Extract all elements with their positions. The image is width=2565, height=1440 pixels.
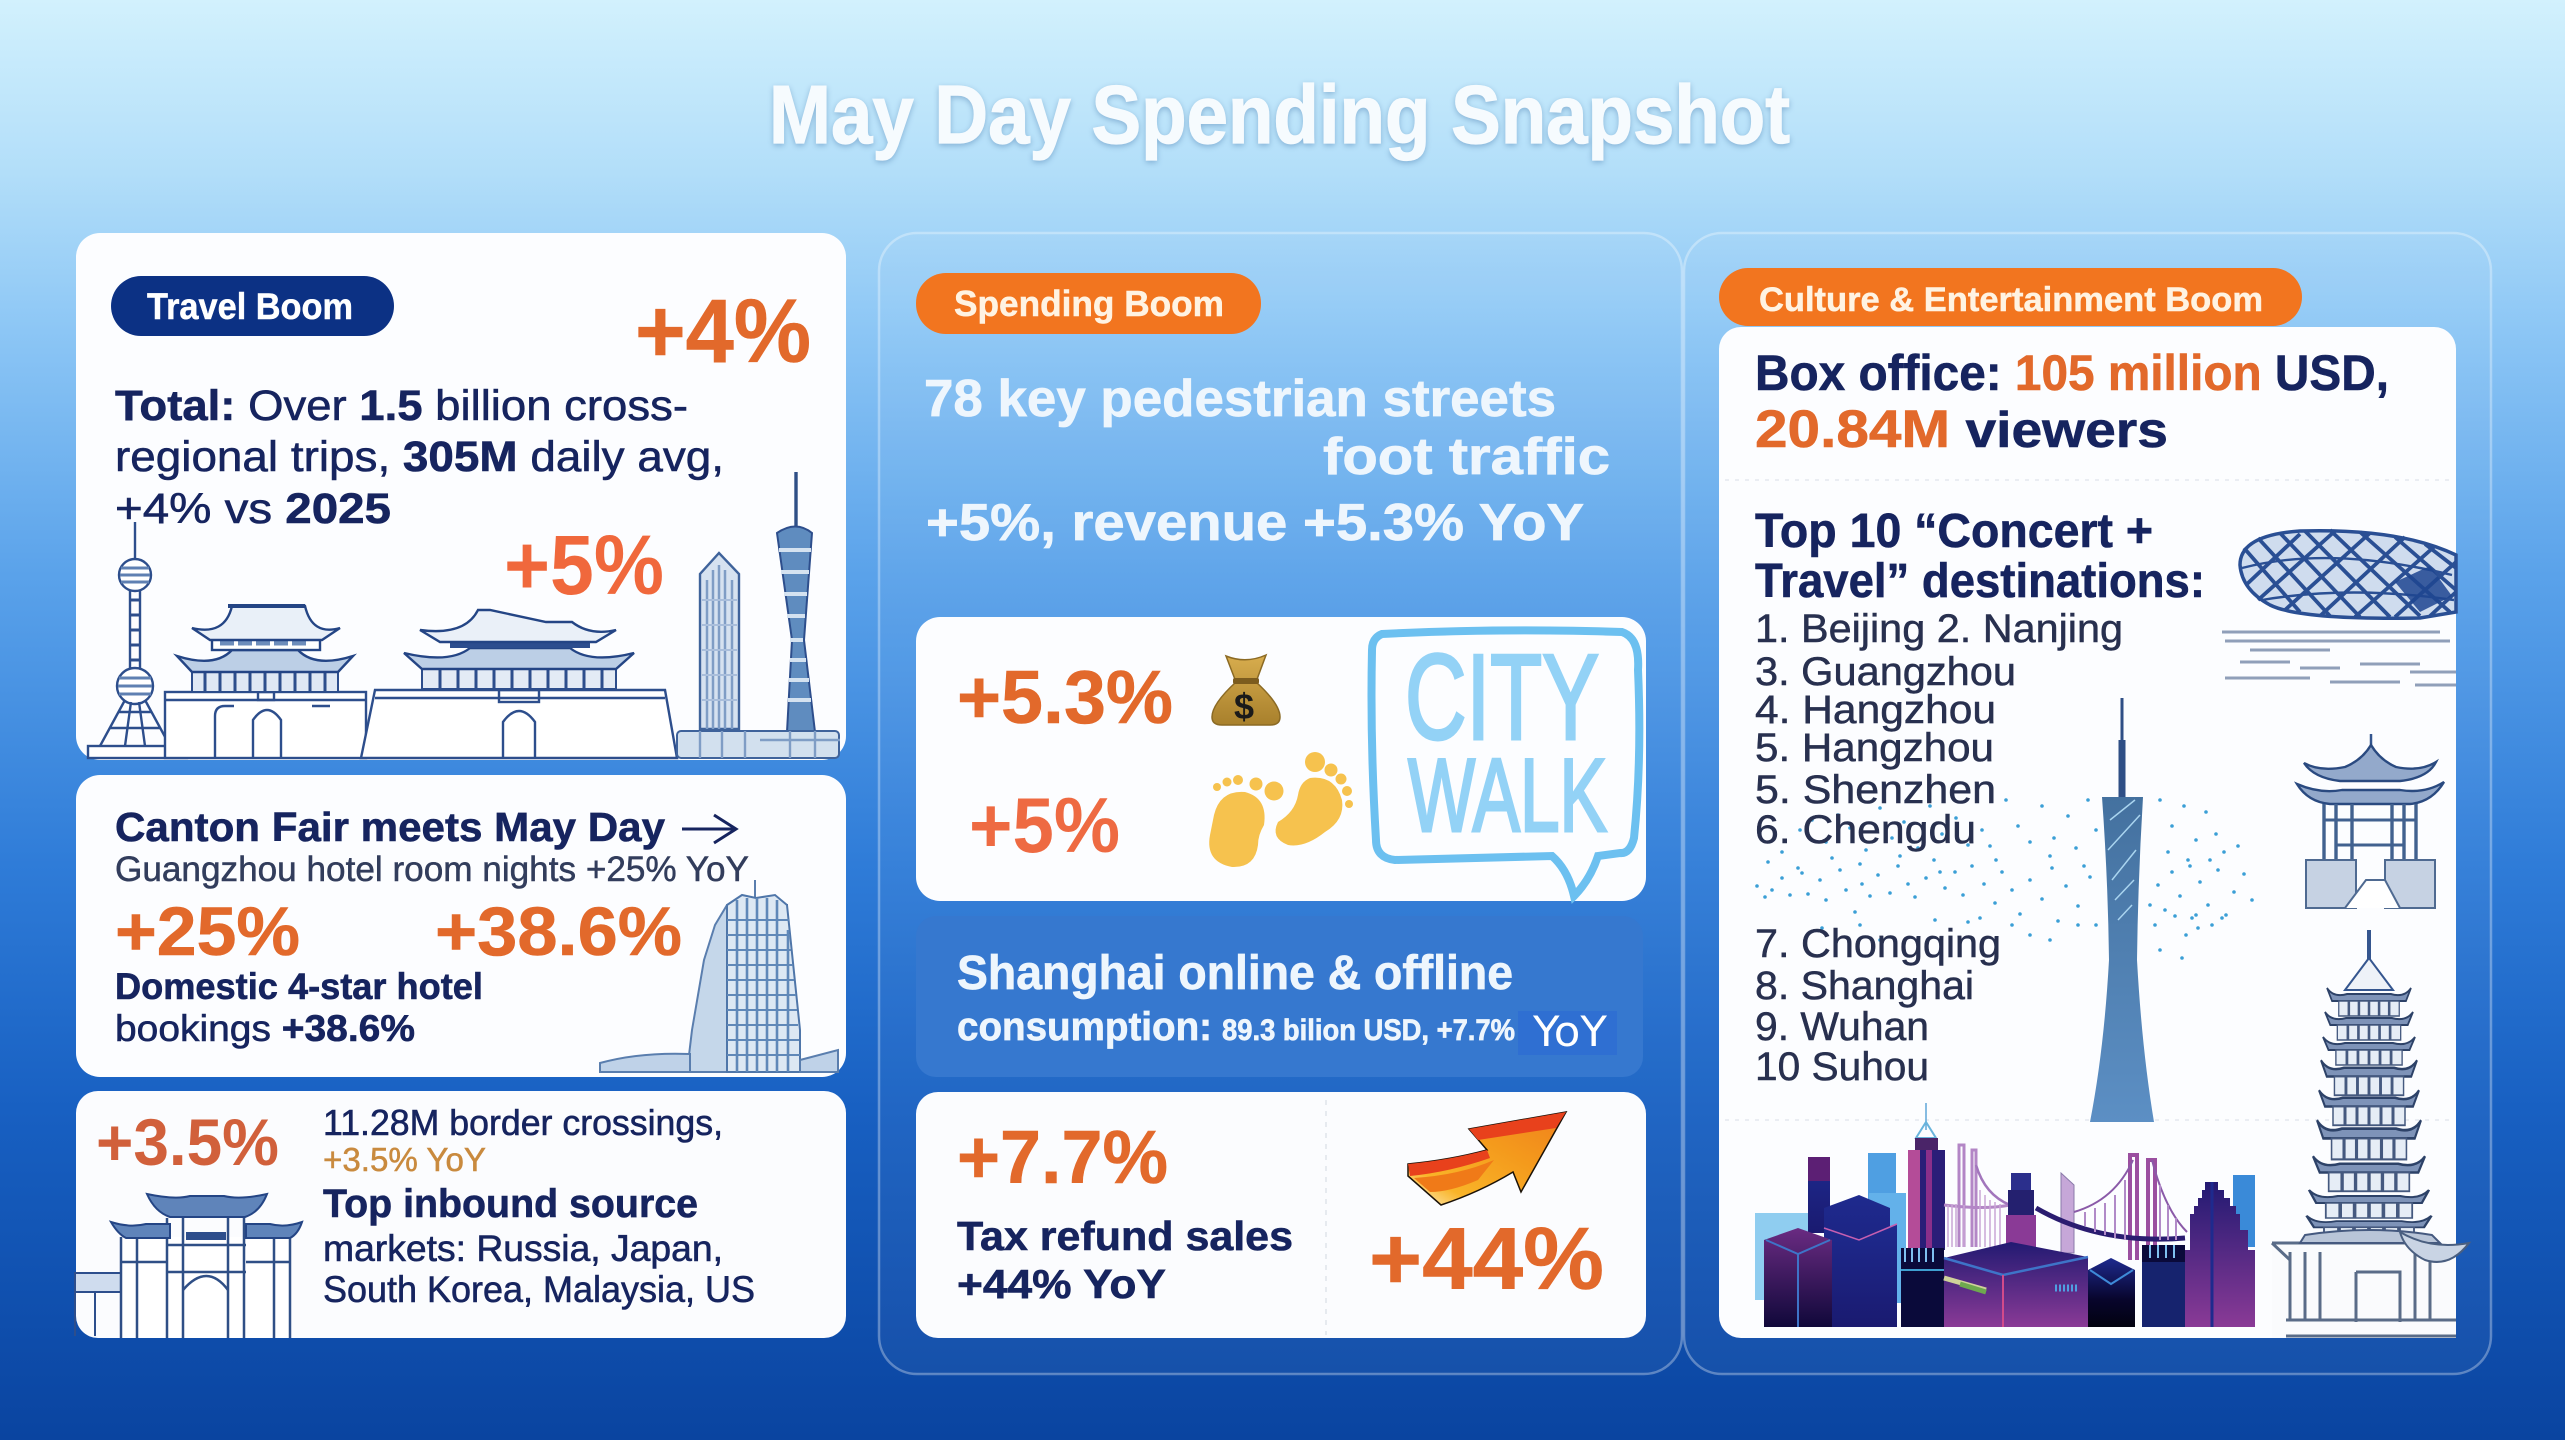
text: total trips [115,382,724,533]
icon: money bag: $ [1234,686,1254,727]
text: border crossings [323,1102,723,1178]
icon: pagoda [2272,930,2469,1338]
panel: culture and entertainment [1719,327,2469,1338]
title: May Day Spending Snapshot [769,68,1790,161]
icon: rising arrow [1408,1112,1566,1205]
icon: canton tower [2090,698,2154,1122]
badge: spending boom: Spending Boom [954,283,1224,324]
text: tax refund: Tax refund sales [957,1213,1293,1259]
text: four-star bookings: Domestic 4-star hotel [115,966,483,1007]
panel: shanghai consumption [916,916,1643,1077]
icon: city walk speech bubble: WALK [1408,738,1607,854]
icon: bird's nest stadium [2240,530,2456,618]
text: tax refund [957,1213,1293,1307]
badge: culture and entertainment boom [1719,268,2302,326]
heading: top ten destinations [1755,505,2205,608]
panel: city walk stats [916,617,1646,901]
text: four-star bookings [115,966,483,1049]
panel: travel boom [76,233,846,760]
text: border crossings: 11.28M border crossings, [323,1102,723,1143]
text: inbound markets: Top inbound source [323,1182,698,1226]
icon: gate two [361,610,677,758]
text: pedestrian streets: foot traffic [1323,428,1610,486]
list: destinations: 7. Chongqing [1755,922,2001,966]
icon: footprints [1209,752,1353,867]
text: pedestrian streets: 78 key pedestrian streets [924,370,1556,428]
text: consumption value: consumption: [957,1005,1212,1049]
icon: oriental pearl tower [88,522,187,758]
icon: paifang gate [75,1194,302,1338]
text: shanghai heading: Shanghai online & offline [957,947,1513,1000]
list: destinations: 5. Hangzhou [1755,726,1994,770]
text: box office [1755,345,2389,459]
list: destinations [1755,607,2123,1089]
icon: money bag [1212,655,1280,727]
panel: canton fair [76,775,846,1077]
text: inbound markets [323,1182,755,1310]
stat: +7.7%: +7.7% [957,1115,1168,1199]
heading: top ten destinations: Top 10 “Concert + [1755,505,2153,558]
text: yoy patch: YoY [1532,1007,1607,1056]
icon: skyscraper [700,553,739,729]
badge: travel boom [111,276,394,336]
badge: culture and entertainment boom: Culture & Entertainment Boom [1759,281,2263,319]
panel: tax refund [916,1092,1646,1338]
text: border crossings: +3.5% YoY [323,1141,486,1178]
text: pedestrian streets [924,370,1610,552]
icon: pavilion [2297,734,2444,908]
text: consumption value [957,1005,1515,1049]
stat: +3.5%: +3.5% [96,1105,279,1179]
list: destinations: 5. Shenzhen [1755,768,1996,812]
dots: fireworks [1757,800,2252,958]
illustration: neon city skyline [1755,1103,2255,1327]
decoration: water lines [2222,632,2456,685]
heading: canton fair: Canton Fair meets May Day [115,804,665,850]
badge: spending boom [916,273,1261,334]
text: consumption value: 89.3 bilion USD, +7.7% [1222,1014,1515,1047]
list: destinations: 1. Beijing 2. Nanjing [1755,607,2123,651]
text: inbound markets: markets: Russia, Japan, [323,1228,723,1269]
text: tax refund: +44% YoY [957,1261,1166,1307]
panel: culture boom outline [1684,233,2491,1374]
icon: canton tower [777,472,815,732]
stat: +5.3%: +5.3% [957,655,1173,739]
text: total trips: regional trips, 305M daily avg, [115,433,724,481]
icon: gate one [165,606,366,758]
text: four-star bookings: bookings +38.6% [115,1008,415,1049]
stat: +5%: +5% [504,518,664,612]
text: box office: 20.84M viewers [1755,400,2168,459]
heading: top ten destinations: Travel” destinations: [1755,555,2205,608]
illustration: skyline [88,472,840,758]
list: destinations: 9. Wuhan [1755,1005,1929,1049]
text: pedestrian streets: +5%, revenue +5.3% YoY [926,494,1584,552]
list: destinations: 3. Guangzhou [1755,650,2016,694]
list: destinations: 8. Shanghai [1755,964,1974,1008]
stat: +25%: +25% [115,893,300,970]
list: destinations: 6. Chengdu [1755,808,1976,852]
badge: travel boom: Travel Boom [147,286,353,327]
stat: +44%: +44% [1369,1209,1604,1308]
icon: city walk speech bubble [1372,629,1639,896]
text: inbound markets: South Korea, Malaysia, US [323,1269,755,1310]
stat: +5%: +5% [969,781,1120,869]
panel: spending boom outline [879,233,1682,1374]
icon: hotel tower [600,880,838,1072]
list: destinations: 10 Suhou [1755,1045,1929,1089]
text: box office: Box office: 105 million USD, [1755,345,2389,401]
stat: +4%: +4% [635,282,811,382]
text: total trips: Total: Over 1.5 billion cross- [115,382,688,430]
list: destinations: 4. Hangzhou [1755,688,1996,732]
stat: +38.6%: +38.6% [435,893,682,970]
text: total trips: +4% vs 2025 [115,485,391,533]
icon: city walk speech bubble: CITY [1405,629,1599,765]
arrow [682,815,736,843]
text: room nights: Guangzhou hotel room nights +25% YoY [115,850,749,889]
icon: low buildings [677,731,840,758]
panel: border crossings [75,1091,846,1338]
